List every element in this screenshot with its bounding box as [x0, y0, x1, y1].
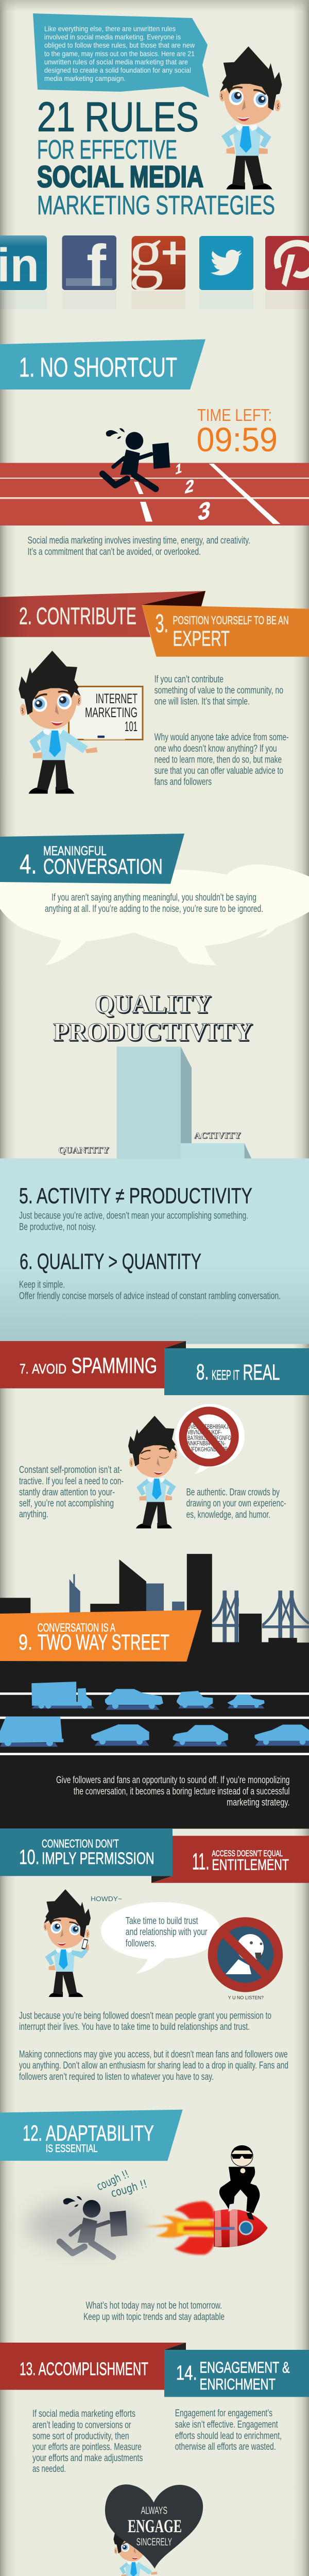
heading: rule 8: REAL [243, 1360, 280, 1385]
text block: rule 10 [19, 2010, 271, 2032]
text block: rule 13 [32, 2409, 143, 2475]
heading: rule 10: 10. [19, 1846, 39, 1869]
panel: intro header [0, 13, 309, 309]
text block: rule 4 [45, 892, 263, 914]
road with traffic [0, 1682, 309, 1755]
intro speech bubble: designed to create a solid foundation for any social [44, 66, 191, 74]
heading: rule 1: 1. NO SHORTCUT [19, 352, 177, 383]
heading: rule 12: ADAPTABILITY [46, 2121, 154, 2146]
heading: rule 14: 14. [176, 2362, 197, 2384]
text block: rule 14: Engagement for engagement’s [175, 2408, 272, 2419]
text block: rule 1 [28, 535, 250, 557]
running track: 1 [175, 460, 183, 478]
caption: cough [95, 2168, 149, 2200]
speech cloud [0, 865, 309, 965]
text block: rule 8: es, knowledge, and humor. [186, 1510, 270, 1520]
social icons row [0, 235, 309, 309]
caption: cough: cough !! [95, 2168, 131, 2193]
heading: rule 8 [164, 1348, 309, 1395]
panel: rules 7 and 8 [0, 1341, 309, 1529]
text block: rule 7: stantly draw attention to your- [19, 1487, 115, 1498]
heading: rule 7 [0, 1341, 186, 1388]
panel: rules 5 and 6 [0, 989, 309, 1344]
intro speech bubble: Like everything else, there are unwritten rules [44, 25, 176, 33]
text block: rule 13: If social media marketing efforts [32, 2409, 135, 2419]
chart: quantity vs quality bars: QUANTITY [58, 1145, 109, 1155]
intro speech bubble: to the game, may miss out on the basics. Here are 21 [44, 49, 195, 58]
heading: rule 2 contribute: 2. CONTRIBUTE [19, 603, 136, 630]
text block: rule 9: marketing strategy. [227, 1797, 289, 1808]
icon: running businessman [102, 428, 170, 489]
text block: rule 3 [154, 732, 289, 787]
speech bubble: no spam: FJFDKGHGNDHTJR [187, 1447, 228, 1453]
heading: quality productivity [53, 989, 253, 1047]
heading: rule 9: 9. [19, 1630, 32, 1655]
timer: time left: TIME LEFT: [197, 405, 272, 425]
speech bubble: no spam: VBVNJKFHUKDF- [187, 1430, 222, 1436]
label: howdy: HOWDY~ [91, 1895, 122, 1903]
text block: rule 12: Keep up with topic trends and stay adaptable [83, 2312, 225, 2323]
whiteboard: internet marketing 101: INTERNET [96, 691, 138, 706]
text block: rule 7 [19, 1465, 124, 1520]
icon: car [254, 1724, 309, 1745]
panel: rule 1 no shortcut [0, 339, 309, 557]
icon: car [177, 1691, 215, 1708]
heading: rule 3 expert: 3. [156, 609, 168, 638]
icon: facebook [62, 233, 116, 309]
character: teaching man [19, 651, 97, 793]
panel: rule 12 adaptability [0, 2110, 268, 2323]
text block: rule 14 [175, 2408, 282, 2452]
text block: rule 9 [56, 1775, 289, 1808]
chart: quantity vs quality bars: ACTIVITY [195, 1131, 242, 1141]
title: FOR EFFECTIVE [37, 135, 177, 165]
whiteboard: internet marketing 101: 101 [125, 719, 138, 734]
text block: rule 13: some sort of productivity, then [32, 2431, 129, 2442]
heading: rule 8: 8. [196, 1360, 209, 1385]
running track: 3 [197, 496, 212, 526]
heading: rule 6: 6. QUALITY > QUANTITY [20, 1249, 201, 1274]
callout: always engage heart: ENGAGE [128, 2516, 182, 2536]
timer: time left [197, 405, 278, 459]
heading: quality productivity: PRODUCTIVITY [54, 1018, 253, 1047]
icon: twitter [199, 236, 253, 309]
character: man under heart [113, 2518, 158, 2576]
text block: rule 11 [19, 2049, 288, 2082]
heading: rule 4: 4. [20, 850, 37, 880]
text block: rule 3: fans and followers [154, 776, 212, 787]
panel: rules 13 and 14 [0, 2343, 309, 2576]
chart: quantity vs quality bars: QUANTITY [59, 1146, 110, 1156]
heading: rule 9: CONVERSATION IS A [38, 1621, 115, 1634]
icon: prohibited meme [212, 1922, 278, 1988]
speech bubble: build trust: and relationship with your [126, 1927, 208, 1938]
heading: rule 4: MEANINGFUL [43, 844, 107, 858]
city skyline [0, 1554, 309, 1829]
speech bubble: no spam: NNKFNB84TKJEN- [187, 1441, 226, 1447]
caption: y u no listen: Y U NO LISTEN? [228, 1995, 264, 2000]
heading: rule 13 [0, 2343, 186, 2390]
text block: rule 2: one will listen. It’s that simple. [154, 697, 250, 707]
text block: rule 13: as needed. [32, 2464, 66, 2475]
flames [142, 2201, 215, 2255]
text block: rule 6: Keep it simple. [19, 1280, 65, 1290]
icon: linkedin [0, 235, 47, 309]
panel: rules 10 and 11 [0, 1828, 309, 2082]
text block: rule 7: anything. [19, 1509, 48, 1520]
text block: rule 12 [83, 2300, 225, 2323]
heading: rule 11 [151, 1836, 309, 1883]
heading: rule 10 [0, 1828, 173, 1876]
heading: rule 4: CONVERSATION [43, 854, 163, 878]
text block: rule 6 [19, 1280, 281, 1302]
icon: car [105, 1689, 163, 1710]
whiteboard: internet marketing 101 [69, 686, 143, 740]
heading: rule 12: 12. [23, 2121, 42, 2146]
icon: google plus [132, 236, 185, 309]
text block: rule 13: your efforts are pointless. Measure [32, 2442, 142, 2453]
heading: rule 3 expert: EXPERT [173, 626, 230, 651]
text block: rule 13: your efforts and make adjustments [32, 2453, 143, 2464]
intro speech bubble [33, 13, 209, 97]
heading: rule 7: AVOID [32, 1361, 66, 1377]
heading: rule 9 [0, 1610, 202, 1662]
callout: always engage heart: ALWAYS [141, 2505, 167, 2517]
character: eyes closed man [128, 1416, 178, 1529]
speech bubble: no spam: UVEKJHTBBH89AKJS [187, 1424, 231, 1430]
panel: rule 9 two way street [0, 1554, 309, 1829]
icon: car [227, 1694, 265, 1708]
icon: facebook: f [87, 233, 107, 299]
speech bubble: no spam: BA7R892JKNBFGNFG [187, 1435, 231, 1442]
speech bubble: no spam [175, 1404, 245, 1474]
callout: always engage heart: SINCERELY [136, 2536, 172, 2548]
smoke cloud [26, 2200, 144, 2249]
icon: google plus: g [129, 214, 164, 291]
text block: rule 5 [19, 1211, 248, 1232]
heading: quality productivity: PRODUCTIVITY [53, 1017, 252, 1046]
heading: rule 10: IMPLY PERMISSION [42, 1849, 154, 1868]
text block: rule 7: Constant self-promotion isn’t at- [19, 1465, 122, 1476]
running track [0, 460, 309, 526]
heading: rule 9: TWO WAY STREET [38, 1630, 169, 1655]
heading: rule 10: CONNECTION DON’T [42, 1837, 119, 1850]
character: cartoon man [219, 46, 282, 189]
rider [219, 2145, 260, 2220]
character: man on phone [44, 1889, 91, 1997]
icon: truck [31, 1682, 95, 1708]
icon: van [0, 1717, 63, 1747]
text block: rule 1: It’s a commitment that can’t be avoided, or overlooked. [28, 547, 201, 557]
heading: rule 7: SPAMMING [71, 1353, 157, 1378]
chart: quantity vs quality bars [0, 1047, 309, 1344]
text block: rule 12: What’s hot today may not be hot tomorrow. [85, 2300, 222, 2311]
speech bubble: build trust [101, 1902, 220, 1974]
text block: rule 7: self, you’re not accomplishing [19, 1498, 114, 1509]
chart: quantity vs quality bars: ACTIVITY [194, 1130, 241, 1141]
panel: rule 4 conversation [0, 834, 309, 965]
heading: rule 4 [0, 834, 184, 884]
bridge [212, 1590, 309, 1642]
heading: rule 12 [0, 2110, 183, 2161]
icon: man riding rocket [142, 2145, 268, 2255]
title: SOCIAL MEDIA [37, 160, 203, 194]
title [37, 94, 275, 221]
intro speech bubble: obliged to follow these rules, but those that are new [44, 41, 195, 49]
heading: rule 2 contribute [0, 591, 205, 637]
panel: rules 2 and 3 [0, 591, 309, 793]
text block: rule 11: followers aren’t required to listen to whatever you have to say. [19, 2072, 214, 2082]
icon: car [173, 1725, 228, 1747]
heading: quality productivity: QUALITY [95, 989, 211, 1018]
running track: 2 [184, 476, 195, 498]
timer: time left: 09:59 [197, 420, 278, 459]
heading: rule 7: 7. [20, 1361, 29, 1377]
heading: rule 14 [164, 2350, 309, 2397]
heading: rule 3 expert [142, 605, 309, 657]
heading: rule 1 [0, 339, 205, 389]
caption: cough: cough !! [110, 2178, 149, 2200]
text block: rule 2: If you can’t contribute [154, 674, 224, 685]
text block: rule 7: tractive. If you feel a need to con- [19, 1476, 124, 1487]
heading: quality productivity: QUALITY [96, 990, 212, 1019]
title: 21 RULES [37, 94, 199, 140]
rocket [214, 2209, 268, 2248]
text block: rule 8 [186, 1487, 286, 1520]
callout: always engage heart [105, 2484, 203, 2569]
heading: rule 14: ENRICHMENT [200, 2375, 276, 2393]
heading: rule 12: IS ESSENTIAL [46, 2143, 97, 2155]
whiteboard: internet marketing 101: MARKETING [85, 705, 138, 720]
speech bubble: build trust: Take time to build trust [126, 1916, 198, 1927]
icon: car [91, 1724, 149, 1745]
icon: pinterest [265, 236, 309, 309]
intro speech bubble: unwritten rules of social media marketing that are [44, 58, 188, 66]
text block: rule 5: Be productive, not noisy. [19, 1222, 97, 1232]
intro speech bubble: involved in social media marketing. Everyone is [44, 33, 181, 41]
heading: rule 8: KEEP IT [212, 1367, 239, 1383]
text block: rule 2 [154, 674, 283, 707]
heading: rule 11: 11. [192, 1849, 209, 1875]
icon: coughing runner [60, 2196, 127, 2257]
intro speech bubble: media marketing campaign. [44, 74, 126, 82]
text block: rule 14: otherwise all efforts are wasted. [175, 2442, 276, 2452]
text block: rule 13: aren’t leading to conversions or [32, 2420, 131, 2431]
heading: rule 13: 13. ACCOMPLISHMENT [20, 2359, 148, 2379]
speech bubble: build trust: followers. [126, 1938, 157, 1949]
